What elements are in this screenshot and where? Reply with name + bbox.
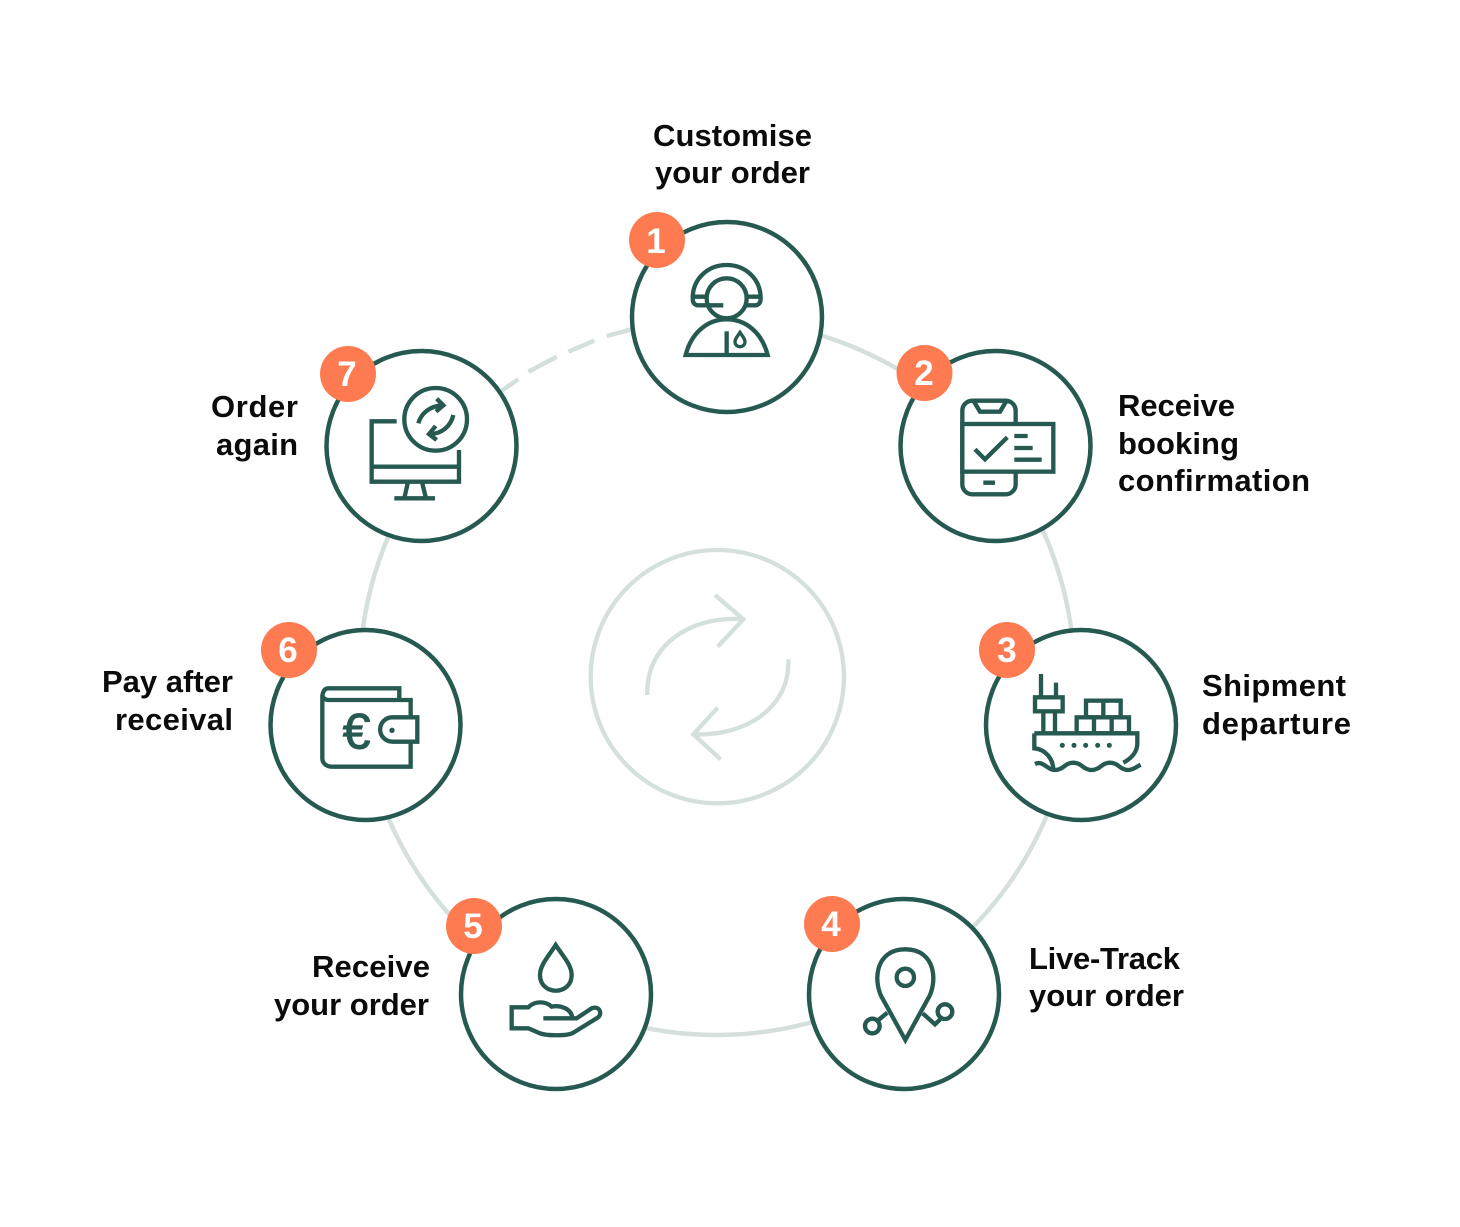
label: customise your order: Customise	[653, 118, 812, 153]
icon: wallet with euro: €	[343, 703, 371, 759]
label: receive your order: your order	[274, 987, 429, 1022]
badge: number 5	[446, 898, 502, 954]
label: receive booking confirmation: confirmation	[1118, 463, 1310, 498]
label: shipment departure: departure	[1202, 706, 1351, 741]
badge: number 6	[261, 622, 317, 678]
icon: phone with confirmation card	[962, 401, 1053, 494]
step 5: receive your order	[274, 898, 651, 1089]
step 3: shipment departure	[979, 622, 1355, 820]
badge: number 7	[320, 346, 376, 402]
step 2: receive booking confirmation	[896, 345, 1310, 541]
icon: monitor with refresh	[372, 388, 467, 498]
badge: number 7: 7	[337, 355, 357, 394]
icon: wallet with euro	[322, 688, 417, 767]
step 6: pay after receival	[102, 622, 460, 820]
badge: number 5: 5	[463, 907, 483, 946]
label: order again: again	[216, 427, 298, 462]
label: customise your order: your order	[655, 155, 810, 190]
cycle track ring	[359, 320, 1074, 1035]
icon: container ship	[1034, 674, 1141, 770]
label: order again: Order	[211, 389, 298, 424]
badge: number 3	[979, 622, 1035, 678]
central refresh emblem	[591, 550, 844, 803]
label: shipment departure: Shipment	[1202, 668, 1346, 703]
label: live-track your order: Live-Track	[1029, 941, 1181, 976]
label: receive booking confirmation: booking	[1118, 426, 1239, 461]
badge: number 1	[629, 212, 685, 268]
label: receive booking confirmation: Receive	[1118, 388, 1235, 423]
icon: customer service agent	[686, 265, 768, 355]
label: receive your order: Receive	[312, 949, 430, 984]
badge: number 6: 6	[278, 631, 298, 670]
badge: number 2: 2	[914, 354, 934, 393]
label: live-track your order: your order	[1029, 978, 1184, 1013]
icon: map pin with route nodes	[865, 949, 952, 1040]
label: pay after receival: Pay after	[102, 664, 233, 699]
step 4: live-track your order	[804, 896, 1188, 1089]
badge: number 1: 1	[646, 222, 666, 261]
label: pay after receival: receival	[115, 702, 233, 737]
icon: hand receiving drop	[512, 945, 600, 1035]
step 1: customise your order	[629, 118, 822, 412]
badge: number 4: 4	[821, 905, 841, 944]
step 7: order again	[211, 346, 516, 541]
badge: number 4	[804, 896, 860, 952]
badge: number 3: 3	[997, 631, 1017, 670]
badge: number 2	[896, 345, 952, 401]
